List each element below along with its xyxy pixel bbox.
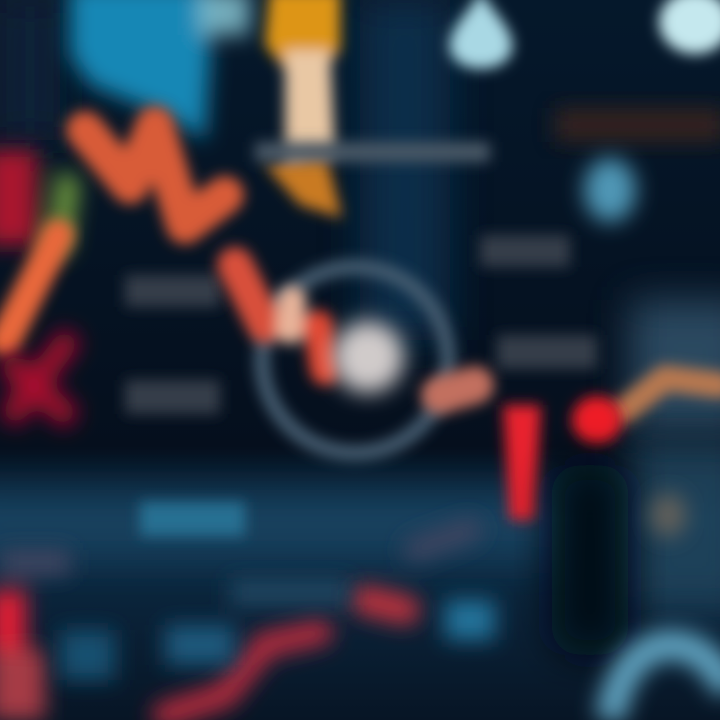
dark red cross marker — [5, 335, 72, 420]
red shape on the left edge — [0, 150, 80, 262]
lower red trend line — [165, 530, 470, 715]
red bars on the right — [503, 396, 622, 520]
lower left red block — [0, 550, 70, 720]
orange stroke on the left edge — [5, 235, 58, 340]
lens centre highlight — [332, 321, 404, 393]
small blue lamp — [584, 158, 636, 222]
orange and cream figure top — [265, 0, 342, 218]
circular lens ring — [262, 267, 448, 453]
bottom right light arc — [610, 645, 720, 720]
dark silhouette — [552, 465, 628, 655]
lower blue patches — [60, 580, 495, 680]
grey label bars — [125, 142, 597, 536]
top lamps — [450, 0, 720, 69]
small tan spot — [650, 493, 686, 537]
blue figure top — [70, 0, 250, 140]
descending orange and red trend line — [85, 125, 720, 410]
